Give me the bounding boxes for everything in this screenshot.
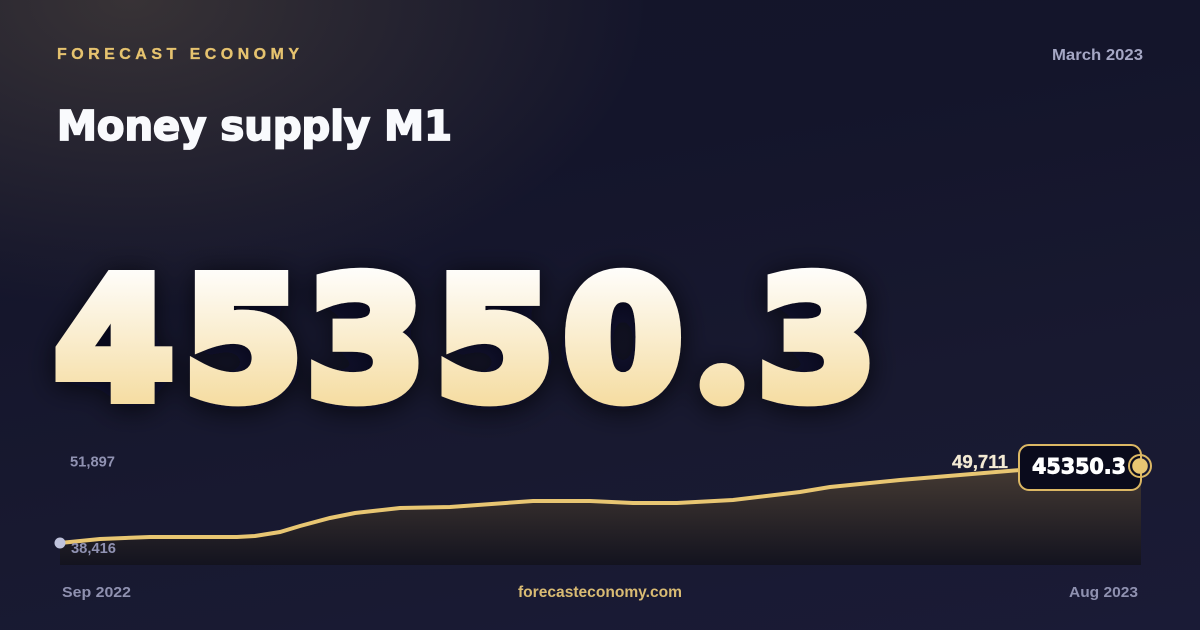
source website: forecasteconomy.com <box>518 584 682 601</box>
chart line <box>60 470 1020 543</box>
eyebrow: brand name: FORECAST ECONOMY <box>57 46 299 63</box>
axis minimum label: 38,416 <box>71 541 116 557</box>
headline value: 45350 <box>55 244 683 437</box>
latest series value label: 49,711 <box>952 452 1008 472</box>
headline value: 3 <box>758 244 876 437</box>
callout: current value <box>1019 445 1141 490</box>
x axis start date: Sep 2022 <box>62 584 131 601</box>
title: Money supply M1 <box>57 102 452 150</box>
chart area fill <box>60 458 1141 565</box>
chart start dot <box>54 538 66 548</box>
sparkline chart <box>54 458 1141 565</box>
callout: current value: 45350.3 <box>1032 454 1126 478</box>
date label: March 2023 <box>1052 47 1143 64</box>
x axis end date: Aug 2023 <box>1069 584 1138 601</box>
axis maximum label: 51,897 <box>70 454 115 470</box>
headline value: . <box>698 231 746 439</box>
current point marker <box>1129 455 1151 477</box>
